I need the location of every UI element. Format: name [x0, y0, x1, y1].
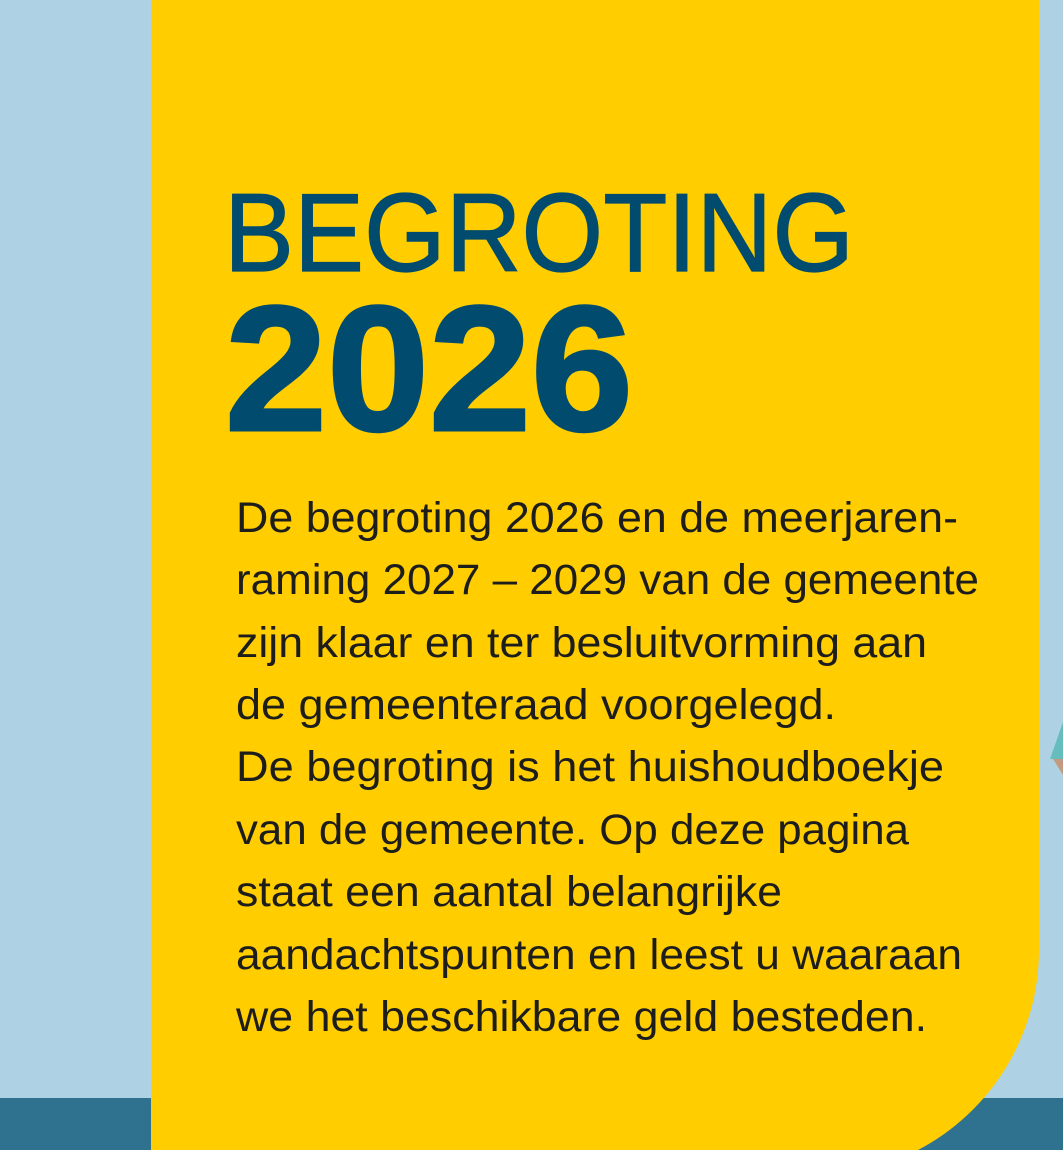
heading: BEGROTING: BEGROTING [224, 171, 854, 295]
text block: introduction: we het beschikbare geld besteden. [235, 993, 927, 1041]
text block: introduction: staat een aantal belangrijke [236, 868, 782, 916]
text block: introduction: de gemeenteraad voorgelegd. [236, 681, 836, 729]
dark blue bottom band [0, 1098, 1063, 1150]
text block: introduction: van de gemeente. Op deze pagina [236, 806, 909, 854]
text block: introduction: aandachtspunten en leest u waaraan [236, 931, 962, 979]
text block: introduction: zijn klaar en ter besluitvorming aan [236, 619, 927, 667]
text block: introduction [235, 494, 979, 1041]
text block: introduction: raming 2027 – 2029 van de gemeente [236, 556, 979, 604]
heading: 2026: 2026 [225, 269, 633, 468]
text block: introduction: De begroting is het huishoudboekje [236, 743, 944, 791]
text block: introduction: De begroting 2026 en de meerjaren- [236, 494, 958, 542]
icon: partial teal and brown shape at right edge [1050, 722, 1063, 775]
